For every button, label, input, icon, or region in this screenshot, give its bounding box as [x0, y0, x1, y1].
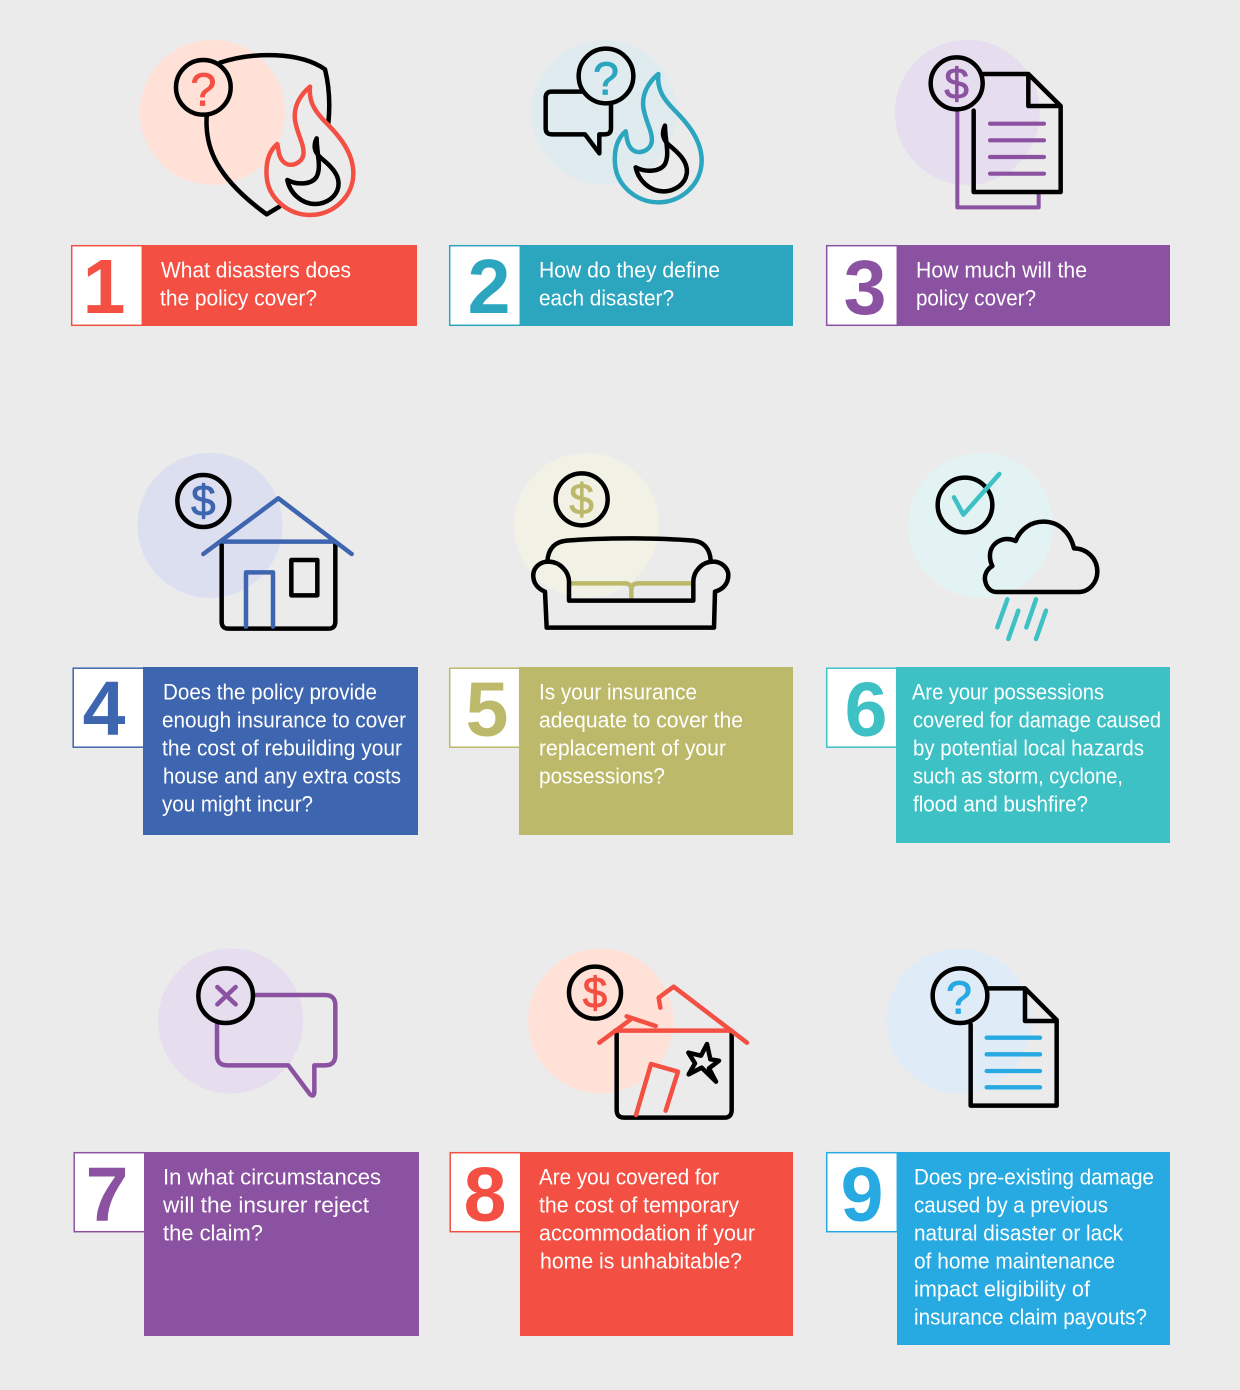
icon: damaged house with dollar	[528, 948, 747, 1118]
card 1	[72, 244, 417, 330]
card 4: enough insurance to cover	[162, 708, 406, 732]
panel 9: pre-existing damage	[827, 948, 1170, 1345]
card 6: by potential local hazards	[913, 736, 1144, 760]
card 9: insurance claim payouts?	[914, 1304, 1147, 1330]
card 6: 6	[845, 667, 887, 753]
card 9: of home maintenance	[914, 1248, 1115, 1274]
panel 8: temporary accommodation	[450, 948, 793, 1336]
card 2	[450, 244, 793, 330]
card 4	[73, 666, 418, 835]
icon: house with dollar: $	[191, 477, 216, 526]
panel 2: how disasters are defined	[450, 40, 793, 330]
icon: policy documents with dollar	[895, 40, 1061, 207]
card 9: impact eligibility of	[914, 1276, 1091, 1302]
card 5: replacement of your	[539, 736, 726, 760]
card 7	[74, 1152, 419, 1336]
card 5: possessions?	[539, 764, 665, 788]
card 5: adequate to cover the	[539, 708, 743, 732]
icon: shield with question and flame	[140, 40, 353, 215]
panel 6: local hazards	[827, 453, 1170, 843]
panel 1: disasters covered	[72, 40, 417, 330]
card 1: What disasters does	[161, 258, 351, 282]
card 2: 2	[468, 244, 510, 330]
card 6: flood and bushfire?	[913, 792, 1088, 816]
card 1: 1	[83, 244, 125, 330]
card 2: each disaster?	[539, 286, 674, 310]
card 4: Does the policy provide	[163, 680, 377, 704]
card 6: such as storm, cyclone,	[913, 764, 1123, 788]
panel 4: cost of rebuilding	[73, 453, 418, 835]
card 9: 9	[841, 1152, 883, 1238]
icon: house with dollar	[137, 453, 352, 629]
icon: policy documents with dollar: $	[944, 59, 969, 108]
card 6	[827, 667, 1170, 843]
icon: speech bubble with cross	[158, 948, 335, 1096]
card 7: 7	[86, 1152, 128, 1238]
card 5	[450, 667, 793, 835]
icon: rain cloud with check mark	[908, 453, 1097, 639]
card 9: caused by a previous	[914, 1192, 1108, 1218]
card 8	[450, 1152, 793, 1336]
panel 7: rejected claims	[74, 948, 419, 1336]
card 3	[827, 245, 1170, 331]
card 4: house and any extra costs	[163, 764, 401, 788]
card 7: the claim?	[163, 1220, 263, 1246]
card 8: home is unhabitable?	[540, 1248, 742, 1274]
card 9: natural disaster or lack	[914, 1220, 1124, 1246]
card 8: 8	[464, 1152, 506, 1238]
card 9: Does pre-existing damage	[914, 1164, 1154, 1190]
icon: shield with question and flame: ?	[190, 64, 216, 116]
card 3: policy cover?	[916, 286, 1036, 310]
card 4: 4	[83, 666, 126, 752]
card 9	[827, 1152, 1170, 1345]
panel 3: amount of cover	[827, 40, 1170, 331]
card 8: the cost of temporary	[539, 1192, 739, 1218]
icon: speech bubble with question and flame: ?	[593, 53, 619, 105]
card 5: Is your insurance	[539, 680, 697, 704]
card 3: How much will the	[916, 258, 1087, 282]
card 5: 5	[466, 667, 508, 753]
card 8: accommodation if your	[539, 1220, 755, 1246]
card 6: covered for damage caused	[913, 708, 1161, 732]
card 7: In what circumstances	[163, 1164, 381, 1190]
card 1: the policy cover?	[160, 286, 317, 310]
card 2: How do they define	[539, 258, 720, 282]
icon: document with question	[886, 948, 1057, 1106]
card 4: you might incur?	[162, 792, 313, 816]
icon: document with question: ?	[946, 972, 972, 1024]
icon: sofa with dollar: $	[569, 475, 594, 524]
icon: damaged house with dollar: $	[583, 968, 607, 1017]
icon: speech bubble with question and flame	[531, 40, 702, 202]
card 8: Are you covered for	[539, 1164, 719, 1190]
card 3: 3	[844, 245, 886, 331]
icon: sofa with dollar	[514, 453, 728, 628]
card 7: will the insurer reject	[162, 1192, 369, 1218]
card 4: the cost of rebuilding your	[162, 736, 402, 760]
panel 5: possessions replacement	[450, 453, 793, 835]
card 6: Are your possessions	[912, 680, 1104, 704]
